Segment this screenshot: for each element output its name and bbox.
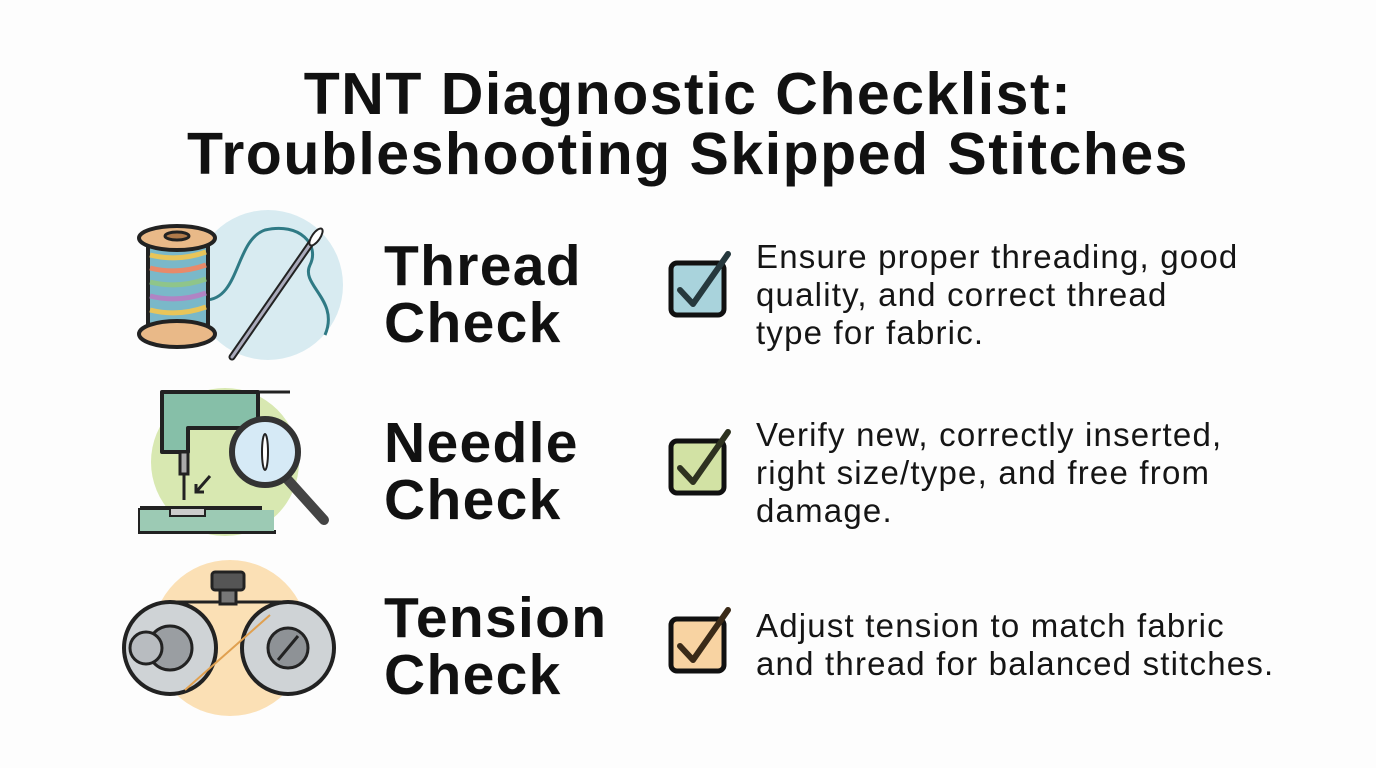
heading: needle check: Check: [384, 468, 562, 532]
text: needle: [756, 416, 1222, 529]
heading: thread check: Check: [384, 291, 562, 355]
title: TNT Diagnostic Checklist:: [304, 61, 1072, 127]
text: tension: [756, 607, 1274, 682]
text: thread: [756, 238, 1238, 351]
icon: tension discs: [122, 560, 336, 716]
text: tension: Adjust tension to match fabric: [756, 607, 1225, 644]
heading: thread check: [384, 234, 582, 355]
title: [187, 61, 1189, 187]
heading: tension check: Check: [384, 643, 562, 707]
text: thread: Ensure proper threading, good: [756, 238, 1238, 275]
text: thread: quality, and correct thread: [756, 276, 1168, 313]
checkbox: needle: [668, 429, 731, 496]
text: needle: damage.: [756, 492, 893, 529]
text: needle: right size/type, and free from: [756, 454, 1210, 491]
heading: needle check: Needle: [384, 411, 579, 475]
heading: needle check: [384, 411, 579, 532]
text: thread: type for fabric.: [756, 314, 984, 351]
checkbox: thread: [668, 251, 731, 318]
text: tension: and thread for balanced stitches.: [756, 645, 1274, 682]
heading: tension check: Tension: [384, 586, 607, 650]
heading: tension check: [384, 586, 607, 707]
heading: thread check: Thread: [384, 234, 582, 298]
checkbox: tension: [668, 607, 731, 674]
text: needle: Verify new, correctly inserted,: [756, 416, 1222, 453]
icon: sewing machine with magnifier: [138, 388, 329, 536]
title: Troubleshooting Skipped Stitches: [187, 121, 1189, 187]
icon: thread spool and needle: [137, 210, 343, 360]
